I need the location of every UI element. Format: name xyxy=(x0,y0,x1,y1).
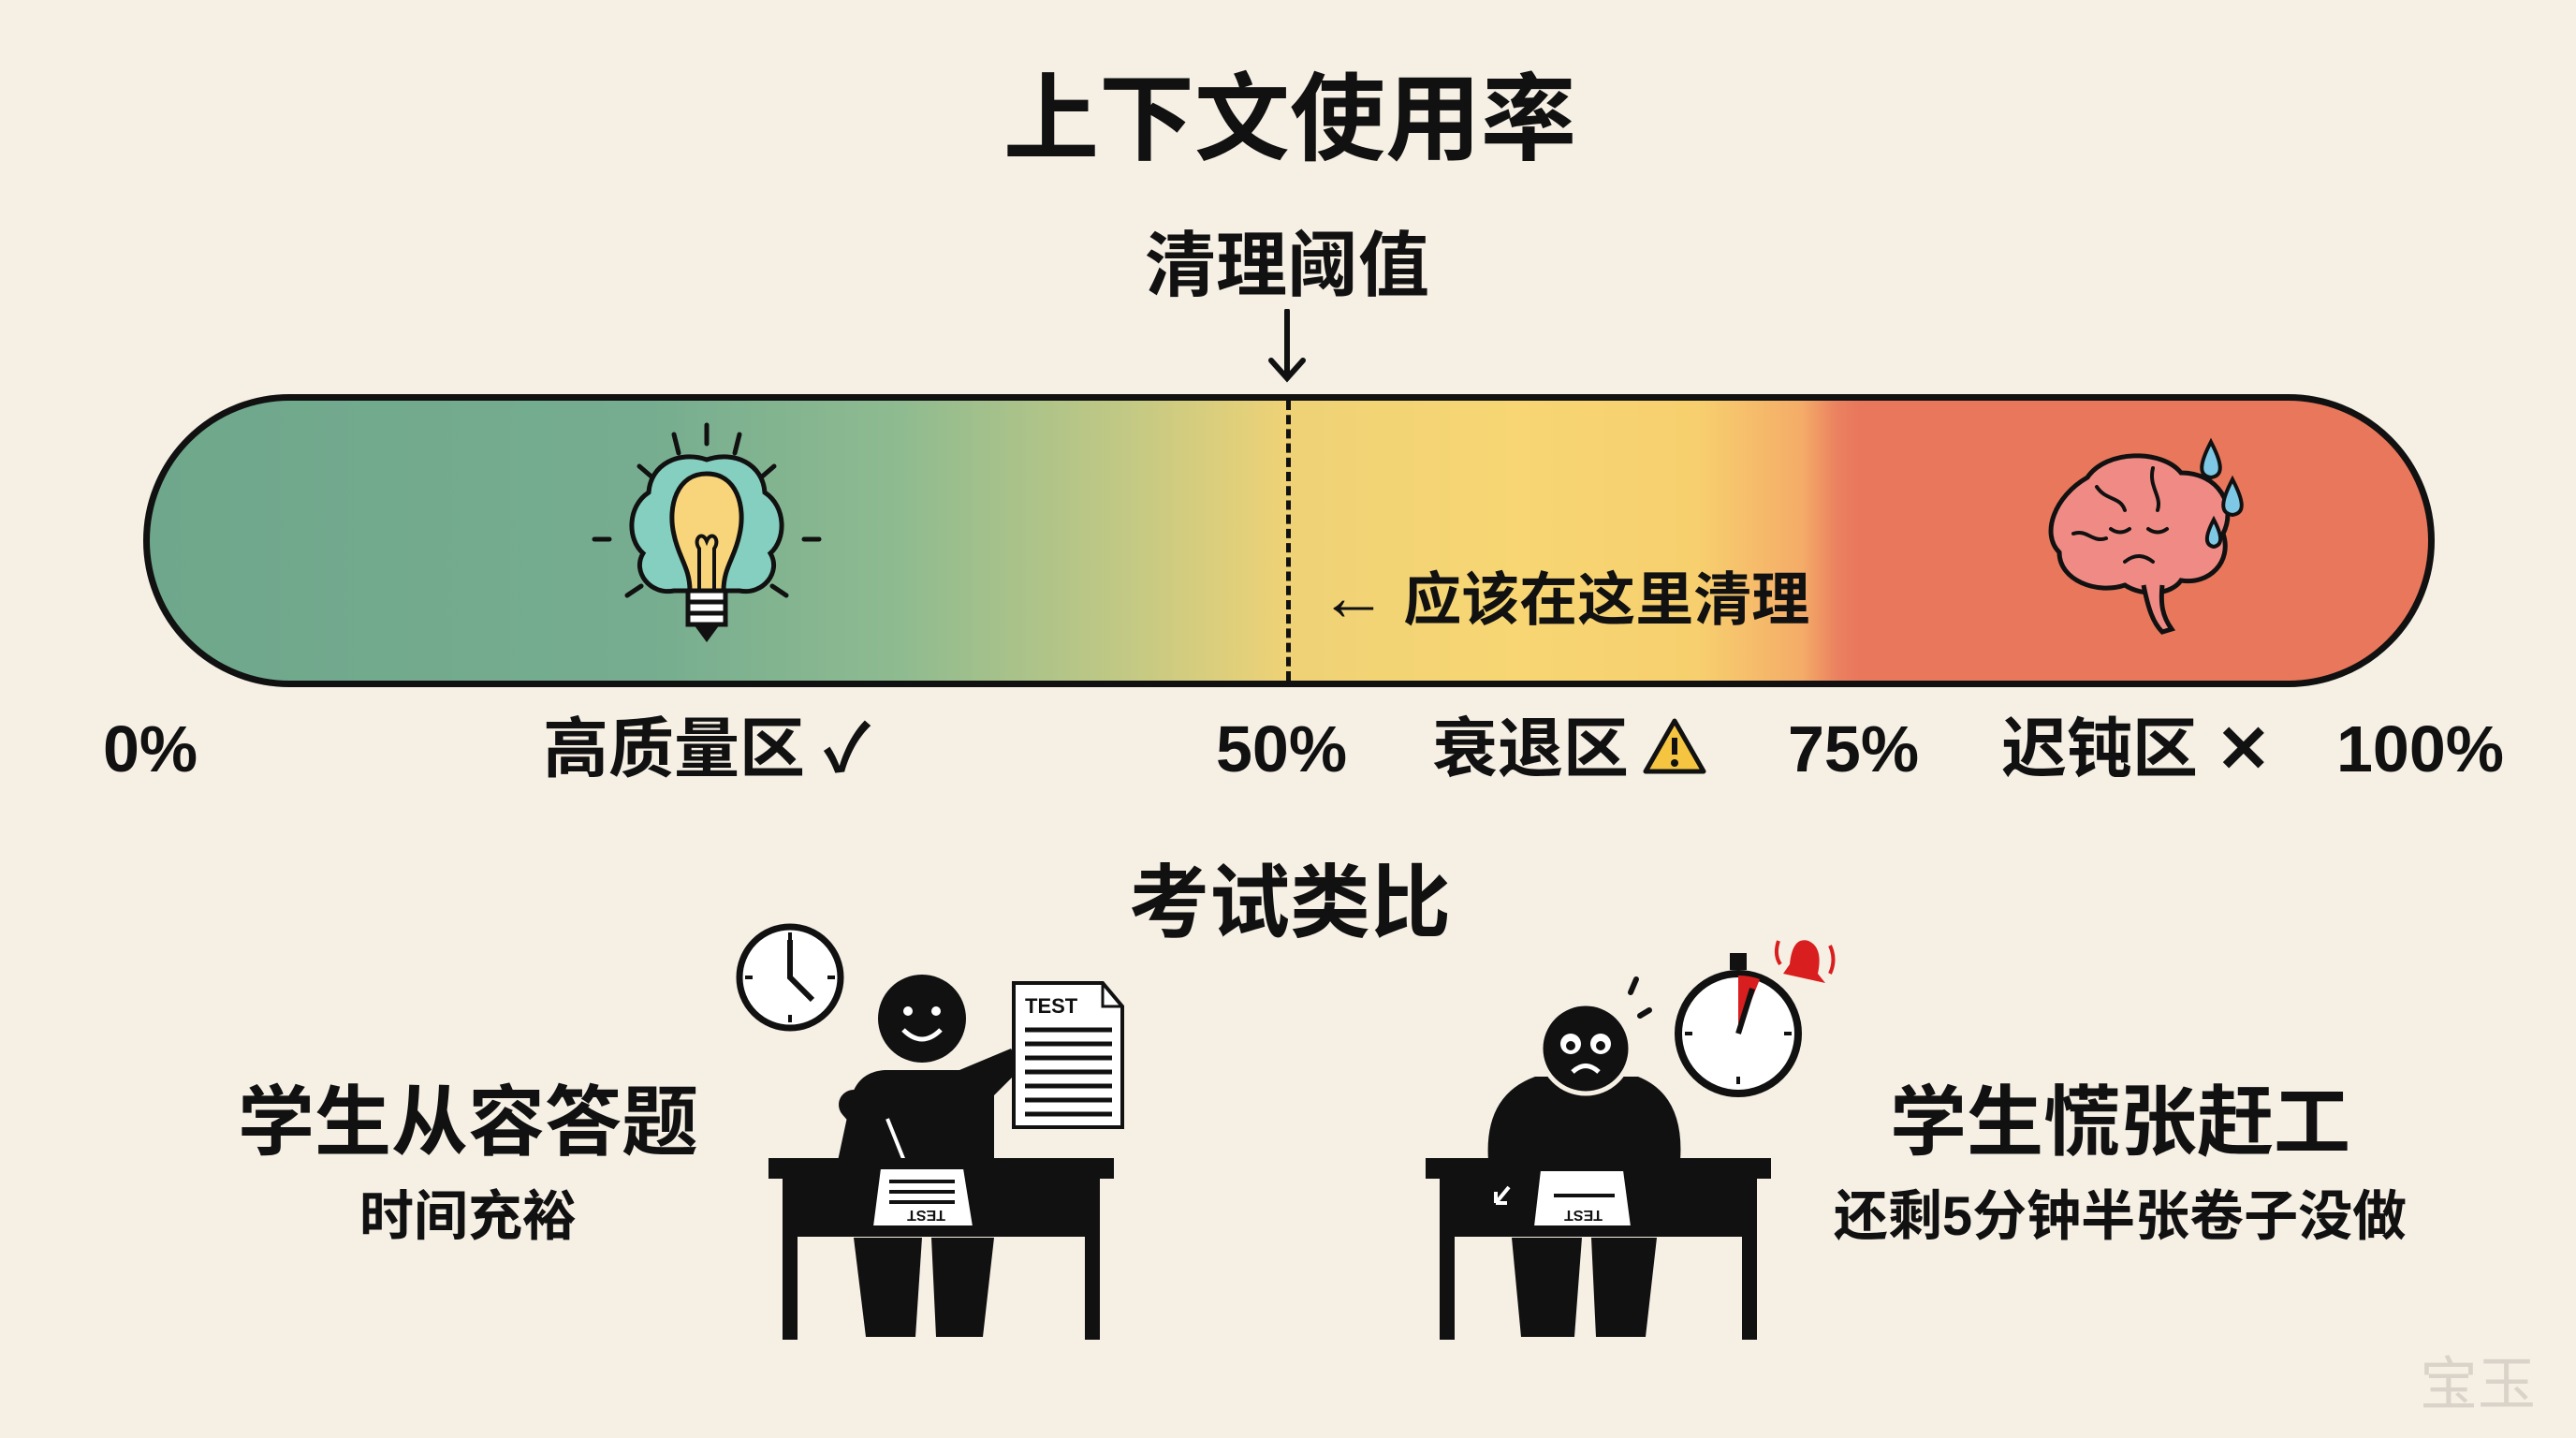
label 0%: 0% xyxy=(103,712,198,785)
test paper held up: TEST xyxy=(1025,994,1078,1018)
title: 上下文使用率 xyxy=(1003,66,1576,173)
threshold label: 清理阈值 xyxy=(1145,227,1429,306)
dashed threshold line xyxy=(1286,401,1291,681)
context usage bar xyxy=(143,394,2435,687)
text: panicked student: 学生慌张赶工 xyxy=(1890,1080,2350,1166)
figure: panicked student at desk: TEST xyxy=(1564,1207,1603,1223)
text: calm student: 时间充裕 xyxy=(359,1186,577,1247)
figure: calm student at desk: TEST xyxy=(907,1207,945,1223)
figure: panicked student at desk xyxy=(1426,979,1771,1340)
arrow: threshold down xyxy=(1268,309,1306,382)
callout: clean here: ← 应该在这里清理 xyxy=(1320,560,1809,635)
icon: stopwatch with alarm xyxy=(1678,940,1833,1093)
label 75%: 75% xyxy=(1788,712,1919,785)
icon: wall clock xyxy=(739,927,841,1028)
scale labels xyxy=(103,712,2504,785)
text: panicked student: 还剩5分钟半张卷子没做 xyxy=(1834,1186,2407,1247)
watermark: 宝玉 xyxy=(2420,1353,2536,1417)
icon: sweating sad brain xyxy=(2048,438,2244,635)
figure: calm student at desk xyxy=(768,975,1122,1340)
label sluggish zone: 迟钝区 ✕ xyxy=(2001,712,2271,785)
label decline zone: 衰退区 xyxy=(1432,712,1629,785)
text: calm student xyxy=(238,1080,698,1247)
text: panicked student xyxy=(1834,1080,2407,1247)
test paper held up xyxy=(1014,983,1122,1127)
text: calm student: 学生从容答题 xyxy=(238,1080,698,1166)
label 100%: 100% xyxy=(2336,712,2504,785)
label high quality zone: 高质量区 ✓ xyxy=(543,712,871,785)
icon: lightbulb brain xyxy=(592,423,822,642)
label 50%: 50% xyxy=(1216,712,1347,785)
subtitle: exam analogy: 考试类比 xyxy=(1129,858,1451,948)
